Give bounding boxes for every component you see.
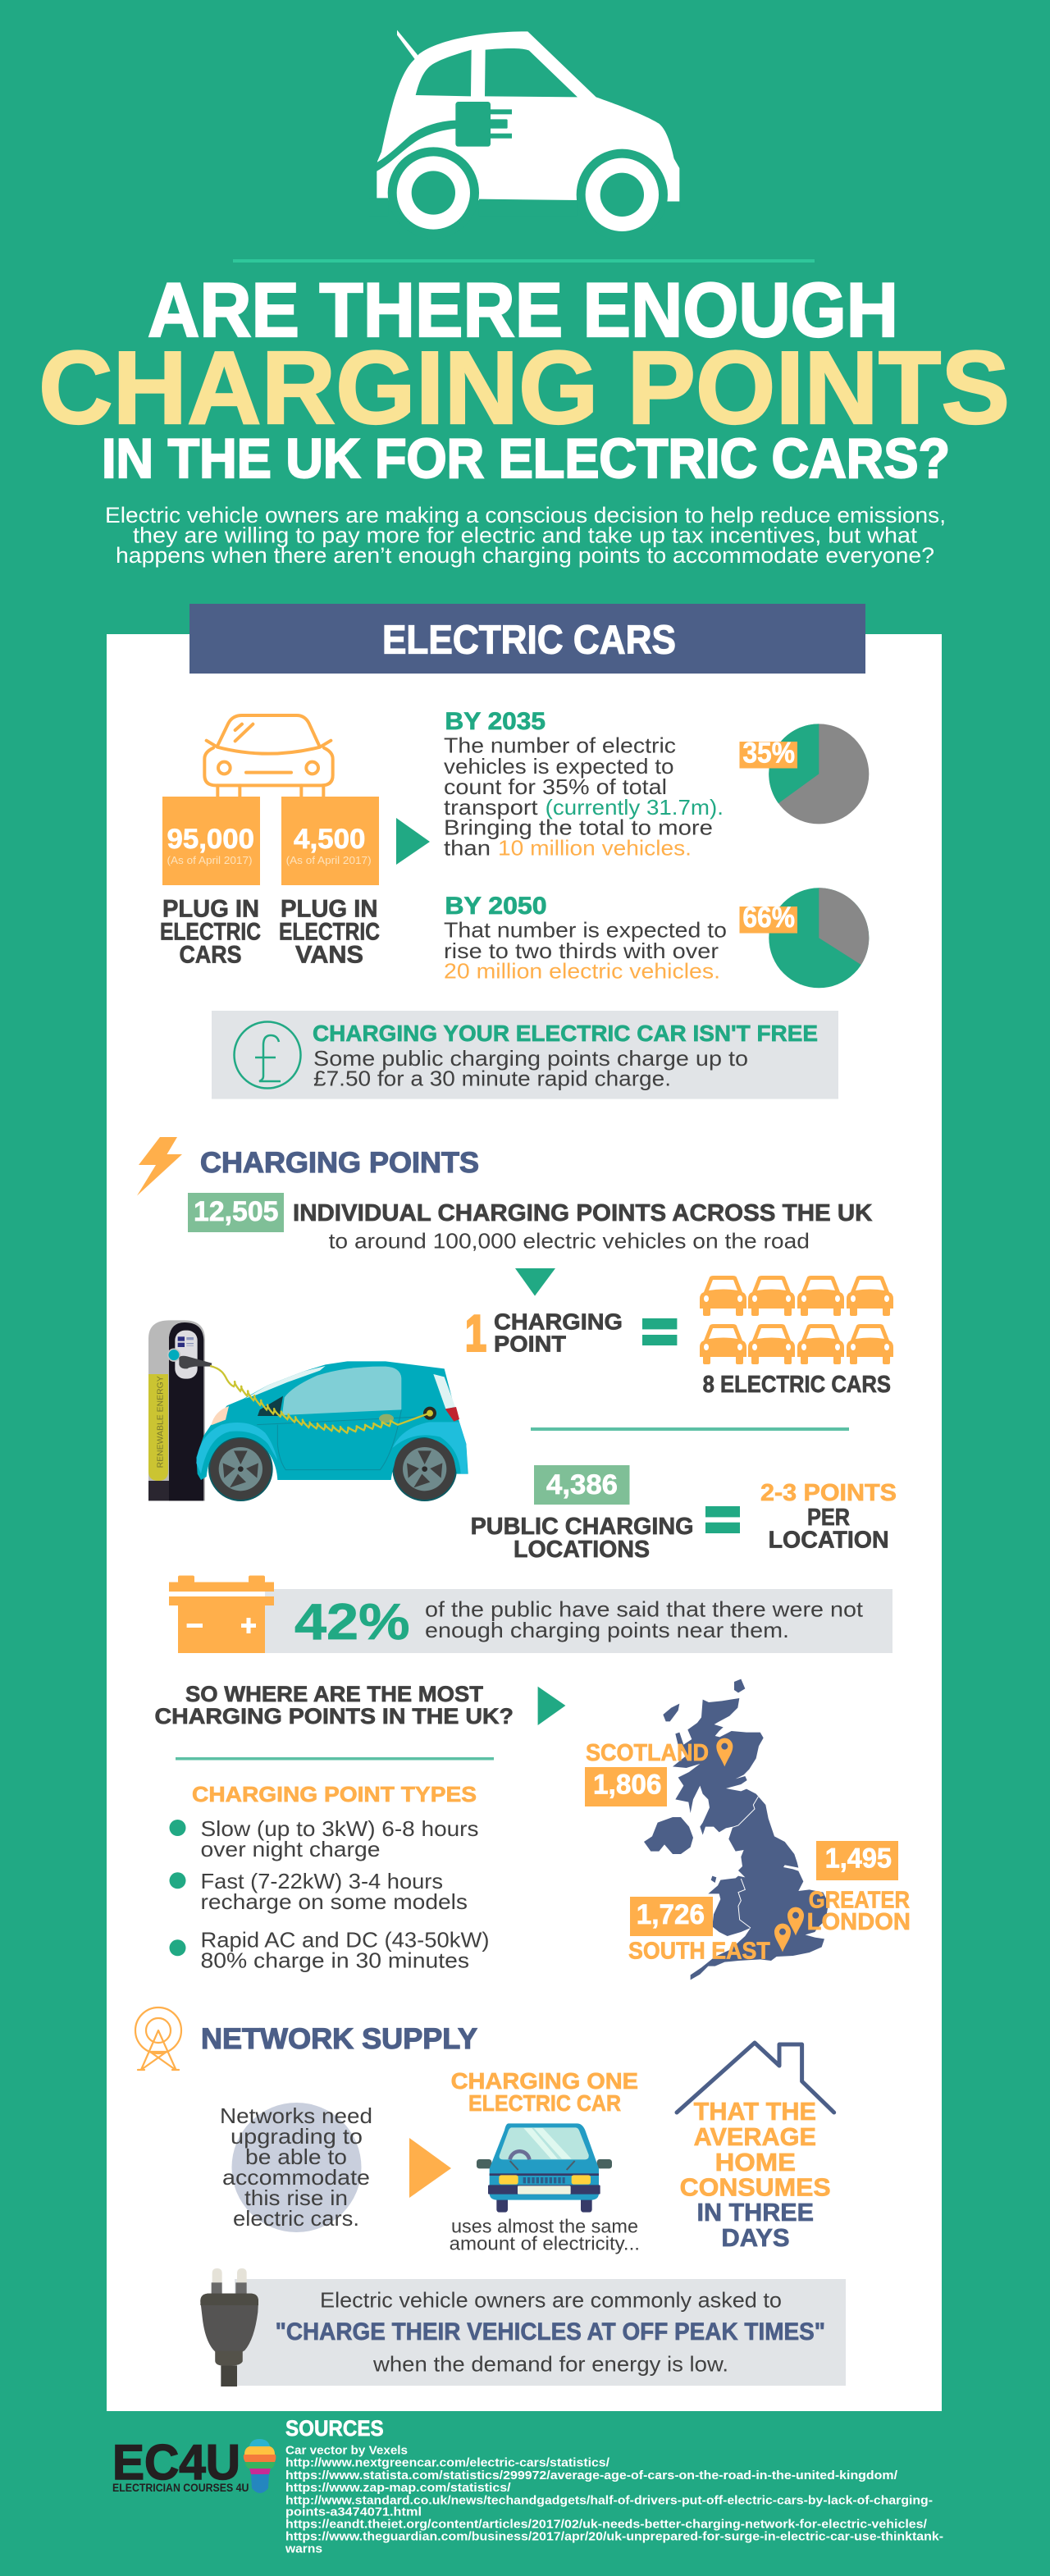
map label: scotland xyxy=(585,1740,709,1806)
heading: charging one electric car xyxy=(451,2068,638,2116)
list: charging point types: CHARGING POINT TYPES xyxy=(192,1782,477,1806)
equation: 1 charging point = 8 electric cars: CHARGING xyxy=(494,1309,623,1334)
callout: charging isn't free: CHARGING YOUR ELECTRIC CAR ISN'T FREE xyxy=(313,1021,818,1046)
equation: 1 charging point = 8 electric cars: POINT xyxy=(494,1331,566,1356)
equation: public charging locations: PER xyxy=(807,1505,850,1531)
heading bar: electric cars: ELECTRIC CARS xyxy=(382,619,676,663)
text block: average home: IN THREE xyxy=(697,2198,814,2227)
stat: plug in electric cars: (As of April 2017) xyxy=(167,854,253,866)
stat: plug in electric vans: PLUG IN xyxy=(281,896,377,922)
sources: http://www.nextgreencar.com/electric-cars/statistics/ xyxy=(285,2456,610,2470)
intro text: Electric vehicle owners are making a conscious decision to help reduce emissions, xyxy=(105,503,946,528)
equation: public charging locations: LOCATIONS xyxy=(514,1537,650,1563)
stat: plug in electric vans: 4,500 xyxy=(294,824,366,855)
heading: network supply: NETWORK SUPPLY xyxy=(201,2023,477,2055)
text block: by 2035: count for 35% of total xyxy=(444,774,667,799)
sources: points-a3474071.html xyxy=(285,2505,422,2519)
icon: hero electric car with plug xyxy=(369,30,681,240)
charging post xyxy=(148,1320,205,1500)
stat: plug in electric vans xyxy=(279,797,380,968)
pie chart: 66%: 66% xyxy=(742,902,795,934)
stat: 12,505 charging points: to around 100,000 electric vehicles on the road xyxy=(329,1229,810,1254)
map label: south east: 1,726 xyxy=(637,1899,705,1930)
arrow xyxy=(396,818,430,865)
map label: scotland: SCOTLAND xyxy=(586,1740,709,1766)
pie chart: 35%: 35% xyxy=(742,737,795,770)
logo: EC4U: EC4U xyxy=(112,2435,240,2490)
list: charging point types xyxy=(169,1782,489,1973)
map label: south east: SOUTH EAST xyxy=(628,1939,770,1965)
charging post: RENEWABLE ENERGY xyxy=(156,1376,165,1468)
icon: house outline xyxy=(677,2043,834,2112)
pie chart: 66% xyxy=(740,888,869,988)
stat: plug in electric vans: VANS xyxy=(295,942,363,968)
stat: 12,505 charging points: 12,505 xyxy=(194,1196,279,1227)
coiled cable xyxy=(210,1366,429,1433)
icons: eight cars xyxy=(700,1276,893,1364)
text block: average home xyxy=(680,2097,831,2252)
map label: greater london: LONDON xyxy=(807,1909,911,1935)
callout: 42% of public: enough charging points near them. xyxy=(425,1618,789,1642)
text block: uses almost the same: amount of electricity... xyxy=(450,2233,640,2254)
text block: networks need upgrading: be able to xyxy=(245,2144,347,2169)
arrow xyxy=(409,2138,451,2198)
callout: 42% of public xyxy=(169,1575,892,1653)
stat: 12,505 charging points xyxy=(188,1193,873,1254)
callout: 42% of public: of the public have said that there were not xyxy=(425,1597,864,1622)
arrow xyxy=(538,1687,565,1725)
text block: uses almost the same xyxy=(450,2216,640,2254)
text block: by 2035 xyxy=(444,708,724,860)
callout: off peak times: when the demand for energy is low. xyxy=(372,2352,728,2377)
pin: greater london xyxy=(788,1907,804,1935)
heading: where are the most charging points: CHARGING POINTS IN THE UK? xyxy=(154,1704,514,1729)
sources: https://www.theguardian.com/business/2017/apr/20/uk-unprepared-for-surge-in-electric-car-use-thinktank- xyxy=(285,2530,943,2544)
equation: public charging locations xyxy=(471,1465,897,1563)
intro text: happens when there aren’t enough charging points to accommodate everyone? xyxy=(116,543,934,568)
list: charging point types: Fast (7-22kW) 3-4 hours xyxy=(200,1869,443,1893)
icon: battery xyxy=(169,1575,274,1653)
icon: transmission tower xyxy=(135,2007,181,2070)
map label: scotland: 1,806 xyxy=(593,1770,661,1801)
sources xyxy=(285,2416,943,2556)
text block: by 2050: That number is expected to xyxy=(444,917,727,942)
text block: by 2035: (currently 31.7m). xyxy=(546,795,724,820)
map label: greater london xyxy=(807,1841,911,1935)
text block: by 2050 xyxy=(444,893,727,984)
callout: off peak times: "CHARGE THEIR VEHICLES AT OFF PEAK TIMES" xyxy=(276,2318,825,2345)
callout: charging isn't free: Some public charging points charge up to xyxy=(313,1046,748,1071)
map: United Kingdom xyxy=(644,1679,829,1980)
map label: greater london: GREATER xyxy=(809,1888,910,1914)
icon: front view car xyxy=(477,2123,612,2213)
sources: https://www.zap-map.com/statistics/ xyxy=(285,2481,511,2495)
equation: public charging locations: PUBLIC CHARGING xyxy=(471,1514,694,1540)
sources: http://www.standard.co.uk/news/techandgadgets/half-of-drivers-put-off-electric-cars-by-lack-of-charging- xyxy=(285,2494,933,2508)
title: CHARGING POINTS xyxy=(39,330,1010,445)
text block: by 2035: The number of electric xyxy=(444,733,676,758)
list: charging point types: 80% charge in 30 minutes xyxy=(200,1948,469,1973)
text block: average home: DAYS xyxy=(721,2223,790,2252)
icon: mains plug xyxy=(200,2268,258,2386)
title: IN THE UK FOR ELECTRIC CARS? xyxy=(102,427,950,490)
text block: by 2035: Bringing the total to more xyxy=(444,815,713,840)
heading: charging one electric car: CHARGING ONE xyxy=(451,2068,638,2094)
heading: charging points: CHARGING POINTS xyxy=(200,1147,479,1179)
icon: car outline xyxy=(204,715,333,797)
equation: public charging locations: 4,386 xyxy=(546,1469,618,1500)
text block: networks need upgrading: this rise in xyxy=(244,2185,348,2210)
stat: plug in electric cars: PLUG IN xyxy=(162,896,259,922)
pin: scotland xyxy=(716,1738,733,1766)
equation: public charging locations: LOCATION xyxy=(769,1527,889,1553)
divider line xyxy=(233,259,815,263)
sources: https://www.statista.com/statistics/299972/average-age-of-cars-on-the-road-in-the-united-kingdom/ xyxy=(285,2469,898,2482)
stat: plug in electric cars xyxy=(160,797,261,968)
equation: 1 charging point = 8 electric cars xyxy=(465,1276,893,1398)
callout: 42% of public: 42% xyxy=(294,1594,410,1651)
text block: networks need upgrading: accommodate xyxy=(222,2165,370,2190)
equation: 1 charging point = 8 electric cars: 1 xyxy=(465,1306,486,1362)
stat: plug in electric cars: ELECTRIC xyxy=(160,919,261,945)
callout: off peak times xyxy=(235,2279,846,2386)
stat: plug in electric cars: 95,000 xyxy=(167,824,254,855)
callout: charging isn't free: £7.50 for a 30 minute rapid charge. xyxy=(313,1066,671,1091)
car xyxy=(196,1361,468,1501)
arrow: down xyxy=(515,1268,555,1296)
list: charging point types: recharge on some models xyxy=(200,1889,468,1914)
pie chart: 35% xyxy=(740,724,869,824)
text block: by 2035: transport xyxy=(444,795,538,820)
text block: average home: AVERAGE xyxy=(694,2122,816,2151)
illustration: charging station and electric car xyxy=(148,1320,468,1501)
text block: by 2050: BY 2050 xyxy=(445,893,547,920)
text block: uses almost the same: uses almost the same xyxy=(451,2216,638,2237)
text block: networks need upgrading: upgrading to xyxy=(231,2124,363,2149)
logo: EC4U: ELECTRICIAN COURSES 4U xyxy=(112,2482,249,2494)
text block: average home: HOME xyxy=(715,2148,796,2176)
text block: by 2035: 10 million vehicles. xyxy=(498,835,692,860)
sources: https://eandt.theiet.org/content/articles/2017/02/uk-needs-better-charging-network-for-electric-vehicles/ xyxy=(285,2518,928,2532)
stat: plug in electric cars: CARS xyxy=(179,942,241,968)
callout: off peak times: Electric vehicle owners are commonly asked to xyxy=(320,2288,782,2313)
text block: networks need upgrading: Networks need xyxy=(220,2103,372,2128)
map label: south east xyxy=(628,1897,770,1965)
list: charging point types: Slow (up to 3kW) 6-8 hours xyxy=(200,1816,479,1841)
text block: average home: CONSUMES xyxy=(680,2173,831,2202)
text block: by 2035: BY 2035 xyxy=(445,708,546,735)
heading: where are the most charging points xyxy=(154,1682,514,1729)
panel: white content xyxy=(107,634,942,2411)
title xyxy=(39,267,1010,490)
stat: plug in electric vans: ELECTRIC xyxy=(279,919,380,945)
sources: warns xyxy=(285,2542,322,2556)
text block: by 2035: than xyxy=(444,835,491,860)
icon: rainbow bulb xyxy=(244,2439,276,2493)
intro text: they are willing to pay more for electric and take up tax incentives, but what xyxy=(133,523,918,548)
heading: where are the most charging points: SO WHERE ARE THE MOST xyxy=(185,1682,484,1706)
title: ARE THERE ENOUGH xyxy=(148,267,898,353)
list: charging point types: over night charge xyxy=(200,1837,381,1861)
stat: plug in electric vans: (As of April 2017) xyxy=(286,854,372,866)
map label: greater london: 1,495 xyxy=(825,1843,892,1875)
icon: lightning bolt xyxy=(137,1137,182,1196)
plug handle xyxy=(179,1356,212,1368)
equation: public charging locations: 2-3 POINTS xyxy=(760,1480,897,1506)
text block: by 2035: vehicles is expected to xyxy=(444,754,674,779)
sources: SOURCES xyxy=(285,2416,384,2441)
text block: by 2050: rise to two thirds with over xyxy=(444,939,719,963)
text block: networks need upgrading: electric cars. xyxy=(233,2206,359,2231)
heading: charging one electric car: ELECTRIC CAR xyxy=(468,2090,621,2116)
equation: 1 charging point = 8 electric cars: 8 ELECTRIC CARS xyxy=(703,1372,891,1398)
intro text xyxy=(105,503,946,568)
text block: average home: THAT THE xyxy=(694,2097,816,2126)
pin: south east xyxy=(774,1924,791,1952)
list: charging point types: Rapid AC and DC (43-50kW) xyxy=(200,1928,489,1953)
sources: Car vector by Vexels xyxy=(285,2444,408,2458)
text block: by 2050: 20 million electric vehicles. xyxy=(444,959,720,984)
heading bar: electric cars xyxy=(189,604,865,674)
callout: charging isn't free xyxy=(212,1011,838,1099)
text block: networks need upgrading xyxy=(220,2103,372,2232)
icon: pound coin xyxy=(235,1022,300,1088)
stat: 12,505 charging points: INDIVIDUAL CHARGING POINTS ACROSS THE UK xyxy=(293,1200,873,1226)
